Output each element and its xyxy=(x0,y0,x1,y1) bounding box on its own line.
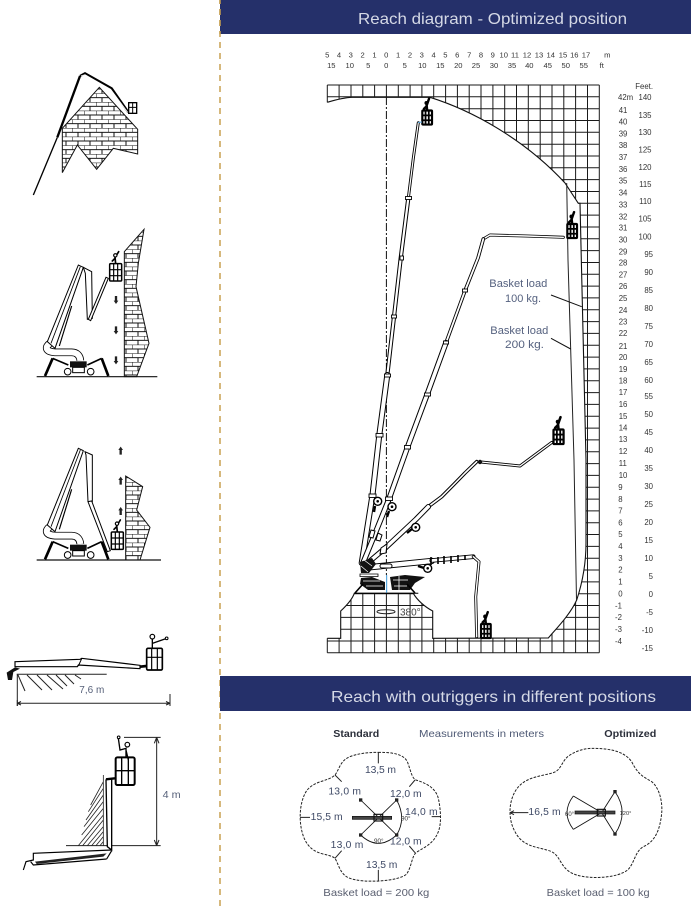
vertical scale in feet: 100 xyxy=(638,232,652,242)
vertical scale in feet: 45 xyxy=(644,428,654,437)
vertical scale in metres: 12 xyxy=(619,447,627,456)
label: basket load 200 kg xyxy=(490,325,571,351)
horizontal scale in metres: 3 xyxy=(420,50,424,60)
vertical scale in metres: 28 xyxy=(619,258,627,268)
horizontal scale in feet: 55 xyxy=(579,61,588,70)
reach outline xyxy=(300,752,441,881)
vertical scale in metres: 41 xyxy=(619,106,627,115)
vertical scale in metres: 15 xyxy=(619,412,628,421)
vertical scale in feet: 115 xyxy=(639,180,652,189)
horizontal scale in feet: 20 xyxy=(454,61,463,70)
horizontal scale in metres: 10 xyxy=(499,50,508,60)
vertical scale in metres: -1 xyxy=(615,602,622,610)
horizontal scale in feet: 15 xyxy=(327,61,336,70)
horizontal scale in metres: 6 xyxy=(455,50,459,60)
vertical scale in feet: 140 xyxy=(638,93,652,102)
heading: reach diagram: Reach diagram - Optimized position xyxy=(358,11,627,28)
vertical scale in metres: 16 xyxy=(619,400,627,409)
horizontal scale in metres: 5 xyxy=(443,50,448,60)
vertical scale in feet: 60 xyxy=(644,376,654,385)
horizontal scale in metres: 16 xyxy=(570,50,579,60)
horizontal scale in metres: 1 xyxy=(396,50,400,60)
boom below ground level xyxy=(367,555,491,638)
vertical scale in metres: 38 xyxy=(619,141,627,150)
horizontal scale in metres: m xyxy=(604,50,610,60)
heading: reach diagram xyxy=(220,0,691,34)
reach arrow xyxy=(510,811,528,815)
vertical scale in feet: 80 xyxy=(644,304,654,313)
vertical scale in feet: 40 xyxy=(644,446,654,455)
horizontal scale in feet: 45 xyxy=(543,61,552,70)
vertical scale in metres: 5 xyxy=(618,530,623,539)
vertical scale in feet: 75 xyxy=(644,322,654,331)
measurement labels xyxy=(528,807,631,818)
horizontal scale in feet: ft xyxy=(600,61,605,70)
horizontal scale in metres: 13 xyxy=(535,50,543,60)
working envelope xyxy=(326,97,586,638)
horizontal scale in feet: 25 xyxy=(472,61,480,70)
heading: optimized: Optimized xyxy=(604,728,656,740)
vertical scale in feet: 15 xyxy=(644,536,654,545)
vertical scale in metres: 13 xyxy=(619,435,627,444)
vertical scale in metres: 34 xyxy=(619,188,628,198)
rotation marker 380 degrees xyxy=(377,608,421,618)
vertical scale in metres: 14 xyxy=(619,424,628,432)
vertical scale in feet: 20 xyxy=(644,518,654,527)
vertical scale in metres: 33 xyxy=(619,200,627,210)
horizontal scale in metres: 2 xyxy=(408,50,412,60)
note: measurements in meters: Measurements in meters xyxy=(419,728,544,740)
boom at maximum height xyxy=(362,99,432,563)
boom at maximum mid reach xyxy=(363,212,577,563)
horizontal scale in feet: 15 xyxy=(436,61,445,70)
vertical scale in feet: 35 xyxy=(644,464,654,473)
machine footprint xyxy=(352,798,402,843)
vertical scale in metres: 6 xyxy=(618,518,623,528)
vertical scale in metres: 3 xyxy=(618,554,623,563)
vertical scale in feet: 85 xyxy=(644,286,654,295)
horizontal scale in metres: 5 xyxy=(325,50,329,60)
horizontal scale in metres: 17 xyxy=(582,50,590,60)
horizontal scale in metres: 11 xyxy=(511,50,519,60)
horizontal scale in metres xyxy=(325,50,610,60)
measurement labels: 90° xyxy=(401,815,411,823)
vertical scale in metres: 18 xyxy=(619,376,627,386)
vertical scale in metres: 20 xyxy=(619,353,628,362)
vertical scale in metres: 26 xyxy=(619,282,627,291)
horizontal scale in metres: 4 xyxy=(431,50,436,60)
caption: basket load 200 kg: Basket load = 200 kg xyxy=(323,887,429,899)
vertical scale in metres: 19 xyxy=(619,365,627,374)
vertical scale in metres: 21 xyxy=(619,342,627,351)
horizontal scale in metres: 0 xyxy=(384,50,388,60)
illustration: lift working upwards along a wall xyxy=(37,447,161,560)
horizontal scale in metres: 12 xyxy=(523,50,531,60)
horizontal scale in metres: 1 xyxy=(372,50,377,60)
measurement labels: 90° xyxy=(374,837,384,845)
measurement labels: 12,0 m xyxy=(390,837,422,848)
vertical scale in feet: 5 xyxy=(649,572,654,581)
dimension line xyxy=(17,694,170,706)
measurement labels: 13,5 m xyxy=(365,765,396,776)
vertical scale in metres: 30 xyxy=(619,236,628,244)
label: basket load 200 kg: 200 kg. xyxy=(505,339,544,351)
vertical scale in feet: 50 xyxy=(644,410,654,419)
horizontal scale in metres: 4 xyxy=(337,50,341,60)
horizontal scale in metres: 2 xyxy=(360,50,365,60)
measurement labels: 120° xyxy=(620,811,631,817)
vertical scale in feet: 120 xyxy=(638,163,652,172)
vertical scale in metres: 29 xyxy=(619,248,627,256)
vertical scale in metres: 35 xyxy=(619,176,628,186)
label: basket load 100 kg: Basket load xyxy=(489,278,547,290)
horizontal scale in feet: 0 xyxy=(384,61,388,70)
vertical scale in feet: Feet. xyxy=(635,82,653,91)
rotation marker 380 degrees: 380° xyxy=(400,608,421,618)
vertical scale in metres: 11 xyxy=(619,459,627,468)
vertical scale in feet: 135 xyxy=(638,111,652,120)
vertical scale in metres: 8 xyxy=(618,495,623,504)
vertical scale in feet: 65 xyxy=(644,358,654,367)
vertical scale in metres: 31 xyxy=(619,224,627,232)
vertical scale in metres: 7 xyxy=(618,506,623,516)
measurement labels: 15,5 m xyxy=(311,812,343,823)
vertical scale in feet: 0 xyxy=(649,590,654,599)
vertical scale in feet: -5 xyxy=(646,608,654,617)
vertical scale in metres: 4 xyxy=(618,542,623,551)
illustration: 4 m reach over a wall xyxy=(23,736,181,870)
horizontal scale in metres: 15 xyxy=(559,50,567,60)
horizontal scale in feet: 50 xyxy=(561,61,570,70)
vertical scale in metres: 9 xyxy=(618,483,623,492)
horizontal scale in metres: 9 xyxy=(491,50,495,60)
vertical scale in feet: 125 xyxy=(638,146,652,154)
dimension label: 7,6 m xyxy=(79,684,105,696)
reach arrows xyxy=(300,752,440,881)
horizontal scale in feet: 40 xyxy=(525,61,534,70)
machine footprint xyxy=(567,790,622,836)
illustration: horizontal outreach 7,6 m xyxy=(7,634,170,706)
vertical scale in metres: 22 xyxy=(619,329,627,338)
measurement labels: 13,0 m xyxy=(328,786,361,797)
vertical scale in feet: 10 xyxy=(644,554,654,563)
vertical scale in feet: 30 xyxy=(644,482,654,491)
measurement labels: 13,0 m xyxy=(331,840,363,851)
vertical scale in metres: 2 xyxy=(618,566,623,574)
vertical scale in feet: 105 xyxy=(638,214,652,224)
reach outline xyxy=(510,748,662,877)
vertical scale in feet: 55 xyxy=(644,392,654,401)
illustration: lift working downwards along a wall xyxy=(37,229,157,377)
horizontal scale in metres: 8 xyxy=(479,50,483,60)
dimension label: 4 m xyxy=(163,789,181,801)
dashed column divider xyxy=(219,0,221,911)
chart: reach diagram xyxy=(325,50,654,653)
vertical scale in metres: -2 xyxy=(615,613,622,622)
vertical scale in metres: 40 xyxy=(619,118,628,126)
vertical scale in metres xyxy=(615,93,633,646)
measurement labels: 12,0 m xyxy=(390,789,422,800)
vertical scale in metres: 42m xyxy=(618,93,633,102)
label: basket load 100 kg xyxy=(489,278,582,307)
vertical scale in feet: 70 xyxy=(644,340,654,349)
boom at low reach xyxy=(363,417,564,567)
vertical scale in feet: 95 xyxy=(644,250,654,259)
vertical scale in metres: 23 xyxy=(619,318,627,326)
horizontal scale in feet: 35 xyxy=(508,61,516,70)
vertical scale in metres: -3 xyxy=(615,625,622,634)
illustration: reaching over a roof xyxy=(33,73,138,195)
vertical scale in metres: 32 xyxy=(619,212,627,222)
horizontal scale in feet xyxy=(327,61,605,70)
vertical scale in metres: 17 xyxy=(619,388,627,397)
horizontal scale in feet: 10 xyxy=(418,61,427,70)
horizontal scale in feet: 30 xyxy=(490,61,498,70)
vertical scale in metres: 37 xyxy=(619,153,627,162)
vertical scale in feet: -10 xyxy=(642,626,654,635)
horizontal scale in metres: 7 xyxy=(467,50,471,60)
horizontal scale in feet: 5 xyxy=(366,61,370,70)
vertical scale in metres: 36 xyxy=(619,165,627,174)
reach grid xyxy=(327,85,599,653)
vertical scale in feet: 25 xyxy=(644,500,654,509)
vertical scale in metres: -4 xyxy=(615,637,623,646)
horizontal scale in feet: 10 xyxy=(345,61,354,70)
machine base xyxy=(354,530,425,593)
label: basket load 200 kg: Basket load xyxy=(490,325,548,337)
panel: optimized outrigger position xyxy=(510,728,662,899)
measurement labels: 16,5 m xyxy=(528,807,561,818)
panel: standard outrigger position xyxy=(300,728,441,899)
vertical scale in metres: 27 xyxy=(619,270,627,280)
measurement labels: 60° xyxy=(565,812,575,818)
measurement labels: 14,0 m xyxy=(405,807,438,818)
heading: outrigger reach xyxy=(220,676,691,711)
cylinder pivots xyxy=(374,497,432,572)
vertical scale in metres: 10 xyxy=(619,471,628,480)
caption: basket load 100 kg: Basket load = 100 kg xyxy=(547,887,650,899)
vertical scale in metres: 1 xyxy=(618,578,623,586)
vertical scale in feet: -15 xyxy=(642,644,654,653)
vertical scale in metres: 24 xyxy=(619,306,628,315)
horizontal scale in metres: 14 xyxy=(546,50,555,60)
vertical scale in feet: 110 xyxy=(639,197,652,206)
vertical scale in feet xyxy=(635,82,654,653)
horizontal scale in metres: 3 xyxy=(349,50,353,60)
measurement labels: 13,5 m xyxy=(366,860,397,871)
vertical scale in metres: 0 xyxy=(618,590,623,598)
horizontal scale in feet: 5 xyxy=(403,61,407,70)
heading: standard: Standard xyxy=(333,728,379,740)
measurement labels xyxy=(311,765,438,871)
vertical scale in metres: 25 xyxy=(619,294,628,303)
centre line xyxy=(385,97,388,593)
vertical scale in metres: 39 xyxy=(619,130,627,138)
heading: outrigger reach: Reach with outriggers in different positions xyxy=(331,689,656,706)
ground hatching xyxy=(17,674,107,706)
vertical scale in feet: 90 xyxy=(644,268,654,277)
label: basket load 100 kg: 100 kg. xyxy=(505,293,541,305)
vertical scale in feet: 130 xyxy=(638,128,652,137)
